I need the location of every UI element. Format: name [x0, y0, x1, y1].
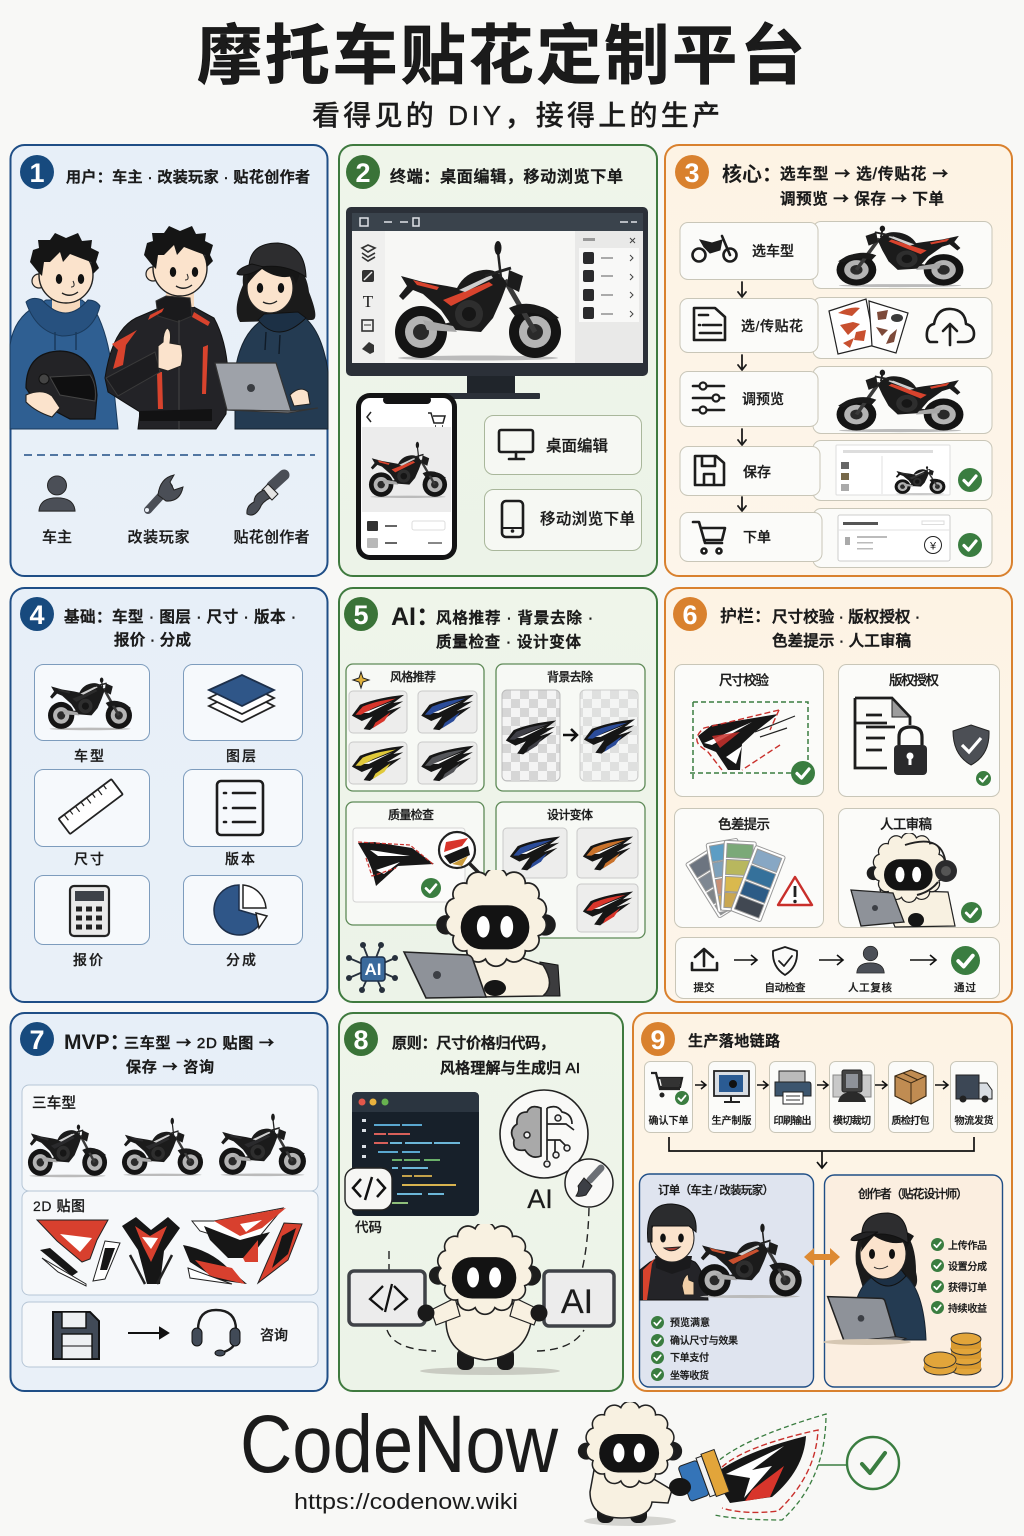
arrow [734, 955, 757, 965]
panel 9 frame [633, 1013, 1012, 1391]
warning [778, 877, 812, 905]
panel 4 frame [10, 588, 328, 1002]
panel 3: core flow [665, 145, 1012, 576]
arrow [738, 282, 746, 297]
badge 4: 4 [29, 600, 45, 630]
icon: AI chip: AI [364, 960, 382, 979]
card: quality check [346, 802, 484, 925]
card: background removal [496, 664, 645, 791]
heading 5: AI： [391, 603, 441, 631]
arrow [757, 1081, 768, 1089]
heading 8: 风格理解与生成归 AI [440, 1060, 580, 1077]
panel 4: foundation [10, 588, 328, 1002]
badge 6 [673, 597, 707, 631]
order checklist: 下单支付 [670, 1351, 709, 1364]
card: variants: 设计变体 [547, 807, 593, 822]
card: model: 车型 [74, 748, 104, 764]
coins [924, 1333, 981, 1375]
brand url: https://codenow.wiki [294, 1489, 518, 1514]
creator checklist: 持续收益 [948, 1302, 987, 1315]
mascot painting decal [578, 1401, 826, 1526]
card: save then consult: 咨询 [260, 1327, 288, 1343]
badge 6: 6 [682, 600, 698, 630]
editor motorcycle [395, 241, 561, 360]
phone motorcycle [369, 442, 447, 498]
panel 3 frame [665, 145, 1012, 576]
preview: decal sheets [829, 299, 908, 354]
card: size [34, 770, 150, 867]
panel 8: principle [339, 1013, 623, 1391]
label: owner: 车主 [42, 529, 72, 546]
arrow [128, 1328, 168, 1338]
step: packing [888, 1062, 934, 1132]
icon: wrench [145, 475, 183, 512]
subtitle: 看得见的 DIY，接得上的生产 [312, 100, 720, 131]
heading 7: MVP： [64, 1031, 131, 1054]
editor right panel [575, 231, 643, 363]
step: upload decal [680, 298, 992, 358]
color swatches [685, 838, 786, 922]
creator figure [823, 1213, 926, 1345]
rider [640, 1204, 708, 1300]
guard flow: 通过 [954, 981, 976, 994]
badge 3: 3 [684, 158, 700, 188]
badge 4 [20, 597, 54, 631]
panel 7 frame [10, 1013, 328, 1391]
icon: shield [773, 947, 797, 975]
arrow [819, 955, 843, 965]
step: select model: 选车型 [752, 243, 794, 259]
card: size check [674, 664, 824, 796]
step: select model [680, 222, 992, 288]
preview: motorcycle [837, 226, 963, 287]
panel 6: guardrails [665, 588, 1012, 1002]
heading 8 [392, 1035, 580, 1077]
icon: brush [247, 475, 284, 515]
arrow [695, 1081, 706, 1089]
heading 3: 选车型 → 选/传贴花 → [780, 162, 948, 184]
AI brain [500, 1090, 588, 1178]
creator checklist [931, 1238, 987, 1315]
heading 8: 原则：尺寸价格归代码， [392, 1035, 555, 1052]
step: plate making: 生产制版 [712, 1114, 752, 1127]
step: die cut: 模切裁切 [833, 1114, 871, 1127]
label: creator: 贴花创作者 [234, 529, 310, 546]
code window [345, 1092, 479, 1216]
card: AI tablet: AI [561, 1283, 593, 1321]
decal grey [421, 746, 474, 781]
guard flow [676, 938, 1000, 998]
card: versions: 版本 [225, 851, 255, 867]
panel 5 frame [339, 588, 657, 1002]
step: confirm order [644, 1062, 692, 1132]
panel 7: MVP [10, 1013, 328, 1391]
step: adjust preview: 调预览 [742, 391, 784, 407]
icon: cart [693, 522, 725, 554]
phone [356, 393, 457, 560]
motorcycle [698, 1224, 802, 1298]
check [958, 468, 982, 492]
panel 2 frame [339, 145, 657, 576]
card: size check: 尺寸校验 [719, 672, 770, 688]
card: three models: 三车型 [32, 1095, 76, 1112]
title: 摩托车贴花定制平台 [197, 19, 805, 92]
preview: motorcycle [837, 370, 963, 432]
step: shipping: 物流发货 [954, 1114, 994, 1127]
step: packing: 质检打包 [892, 1114, 930, 1127]
step: printing: 印刷输出 [774, 1114, 812, 1127]
step: plate making [708, 1062, 756, 1132]
panel 9: production chain [633, 1013, 1012, 1391]
desktop monitor [346, 207, 648, 399]
icon: AI chip [346, 942, 398, 993]
illustration: three users [10, 226, 328, 429]
card: quality check: 质量检查 [388, 807, 434, 822]
step: save: 保存 [743, 464, 771, 480]
card: copyright [838, 664, 1000, 796]
step: adjust preview [680, 366, 992, 434]
double arrow [804, 1248, 840, 1266]
order checklist: 预览满意 [670, 1316, 710, 1329]
heading 4: 基础：车型 · 图层 · 尺寸 · 版本 · [64, 608, 296, 626]
mascot with laptop [404, 868, 560, 998]
badge 1: 1 [29, 158, 45, 188]
heading 5: 质量检查 · 设计变体 [436, 632, 581, 651]
preview: order card [838, 515, 950, 561]
editor left tools [362, 245, 375, 354]
card: style recommendation: 风格推荐 [390, 669, 436, 684]
badge 5: 5 [353, 600, 369, 630]
badge: brush [565, 1159, 613, 1207]
decal red [352, 695, 404, 730]
card: layers: 图层 [226, 748, 256, 764]
shield [953, 725, 989, 765]
card: mobile order: 移动浏览下单 [540, 510, 635, 528]
arrow [935, 1081, 948, 1089]
order checklist: 坐等收货 [670, 1369, 709, 1382]
icon: reviewer [857, 946, 884, 973]
heading 7 [64, 1031, 274, 1077]
card: AI tablet [544, 1271, 614, 1326]
badge 2: 2 [355, 158, 371, 188]
card: creator side: 创作者（贴花设计师） [858, 1186, 968, 1201]
card: save then consult [22, 1302, 318, 1367]
editor left tools: T [363, 292, 374, 311]
heading 9: 生产落地链路 [688, 1033, 780, 1050]
decal set left [37, 1220, 120, 1286]
panel 1 frame [10, 145, 328, 576]
label: AI: AI [527, 1184, 553, 1214]
card: order side: 订单（车主 / 改装玩家） [658, 1183, 774, 1197]
magnifier [439, 832, 482, 876]
card: color difference [674, 808, 824, 928]
order checklist: 确认尺寸与效果 [670, 1334, 738, 1347]
arrow [738, 497, 746, 511]
icon: motorcycle outline [692, 236, 736, 262]
panel 2: terminals [339, 145, 657, 576]
label: code: 代码 [355, 1220, 382, 1235]
check [951, 946, 980, 975]
icon: headset [192, 1310, 240, 1356]
heading 5: 风格推荐 · 背景去除 · [436, 609, 593, 627]
card: copyright: 版权授权 [889, 673, 940, 688]
card: 2D decals: 2D 贴图 [33, 1198, 85, 1214]
creator checklist: 设置分成 [948, 1260, 987, 1273]
heading 4 [64, 608, 296, 649]
step: shipping [950, 1062, 998, 1132]
decal set right [183, 1208, 302, 1284]
panel 6 frame [665, 588, 1012, 1002]
card: quote [34, 876, 150, 968]
card: creator side [823, 1175, 1002, 1387]
person: creator with laptop [215, 243, 328, 429]
badge 8 [344, 1022, 378, 1056]
icon: document [694, 308, 725, 340]
panel 8 frame [339, 1013, 623, 1391]
card: layers [184, 664, 302, 764]
badge 7: 7 [29, 1025, 45, 1055]
step: order: 下单 [743, 529, 771, 545]
heading 2: 终端：桌面编辑，移动浏览下单 [390, 168, 623, 186]
badge 3 [675, 155, 709, 189]
card: style recommendation [346, 664, 484, 791]
heading 6: 护栏： [720, 607, 771, 626]
heading 7: 三车型 → 2D 贴图 → [124, 1032, 274, 1053]
heading 3 [722, 162, 948, 209]
heading 3: 核心： [722, 162, 782, 186]
badge 9: 9 [650, 1025, 666, 1055]
label: modder: 改装玩家 [128, 529, 190, 546]
heading 6 [720, 607, 920, 650]
heading 6: 尺寸校验 · 版权授权 · [772, 608, 920, 626]
creator checklist: 上传作品 [948, 1239, 987, 1252]
card: three models [22, 1085, 318, 1191]
card: variants [496, 802, 645, 938]
decal with trim lines [714, 1414, 826, 1520]
decal blue [421, 695, 474, 730]
arrow [738, 429, 746, 445]
badge 7 [20, 1022, 54, 1056]
icon: cloud upload [927, 309, 974, 345]
icon: upload [692, 949, 717, 970]
mascot holding cards [418, 1222, 560, 1375]
decal yellow [352, 746, 404, 781]
step: confirm order: 确认下单 [648, 1114, 688, 1127]
paint brush [677, 1449, 729, 1505]
card: model [34, 664, 150, 764]
step: upload decal: 选/传贴花 [741, 318, 803, 334]
step: order [680, 508, 992, 568]
icon: floppy [695, 456, 724, 485]
card: desktop edit: 桌面编辑 [546, 437, 608, 455]
card: quote: 报价 [73, 952, 103, 968]
card: order side [640, 1174, 814, 1387]
card: mobile order [484, 490, 642, 550]
connector lines [387, 1208, 589, 1351]
heading 3: 调预览 → 保存 → 下单 [780, 187, 944, 209]
card: color difference: 色差提示 [718, 816, 770, 832]
icon: owner [39, 476, 75, 511]
heading 7: 保存 → 咨询 [126, 1056, 214, 1077]
arrow [738, 355, 746, 370]
arrow [817, 1081, 828, 1089]
step: save [680, 440, 992, 500]
heading 5 [391, 603, 593, 651]
badge 8: 8 [353, 1025, 369, 1055]
panel 1: users [10, 145, 328, 576]
decal set center [122, 1217, 180, 1284]
preview: saved design [836, 445, 950, 495]
divider [24, 454, 315, 456]
card: background removal: 背景去除 [547, 669, 593, 684]
brand logo: CodeNow [240, 1399, 559, 1490]
creator checklist: 获得订单 [948, 1281, 987, 1294]
guard flow: 人工复核 [848, 981, 892, 994]
arrow [875, 1081, 887, 1089]
card: versions [184, 770, 302, 867]
badge 9 [641, 1022, 675, 1056]
panel 5: AI [339, 588, 657, 1002]
card: desktop edit [484, 416, 642, 474]
heading 1: 用户：车主 · 改装玩家 · 贴花创作者 [66, 169, 310, 186]
card: size: 尺寸 [74, 851, 104, 867]
card: share: 分成 [226, 952, 256, 968]
person: car owner with helmet [10, 233, 118, 429]
order checklist [651, 1316, 738, 1382]
card: code tablet [349, 1271, 425, 1325]
icon: sliders [693, 382, 724, 414]
bracket arrow [669, 1137, 974, 1168]
heading 4: 报价 · 分成 [114, 631, 191, 649]
card: share [184, 876, 302, 968]
badge 2 [346, 155, 380, 189]
arrow [910, 955, 936, 965]
check [958, 533, 982, 557]
card: 2D decals [22, 1191, 318, 1295]
card: human review: 人工审稿 [880, 816, 932, 832]
step: printing [770, 1062, 816, 1132]
badge 1 [20, 155, 54, 189]
badge 5 [344, 597, 378, 631]
heading 6: 色差提示 · 人工审稿 [772, 631, 911, 650]
guard flow: 提交 [694, 981, 715, 994]
card: human review [838, 808, 1000, 928]
preview: order card: ¥ [929, 540, 937, 552]
guard flow: 自动检查 [764, 981, 806, 994]
approval check [818, 1437, 899, 1489]
icon: floppy [53, 1312, 99, 1359]
step: die cut [830, 1062, 874, 1132]
person: modder thumbs up [105, 226, 228, 429]
badge: code [345, 1168, 392, 1210]
